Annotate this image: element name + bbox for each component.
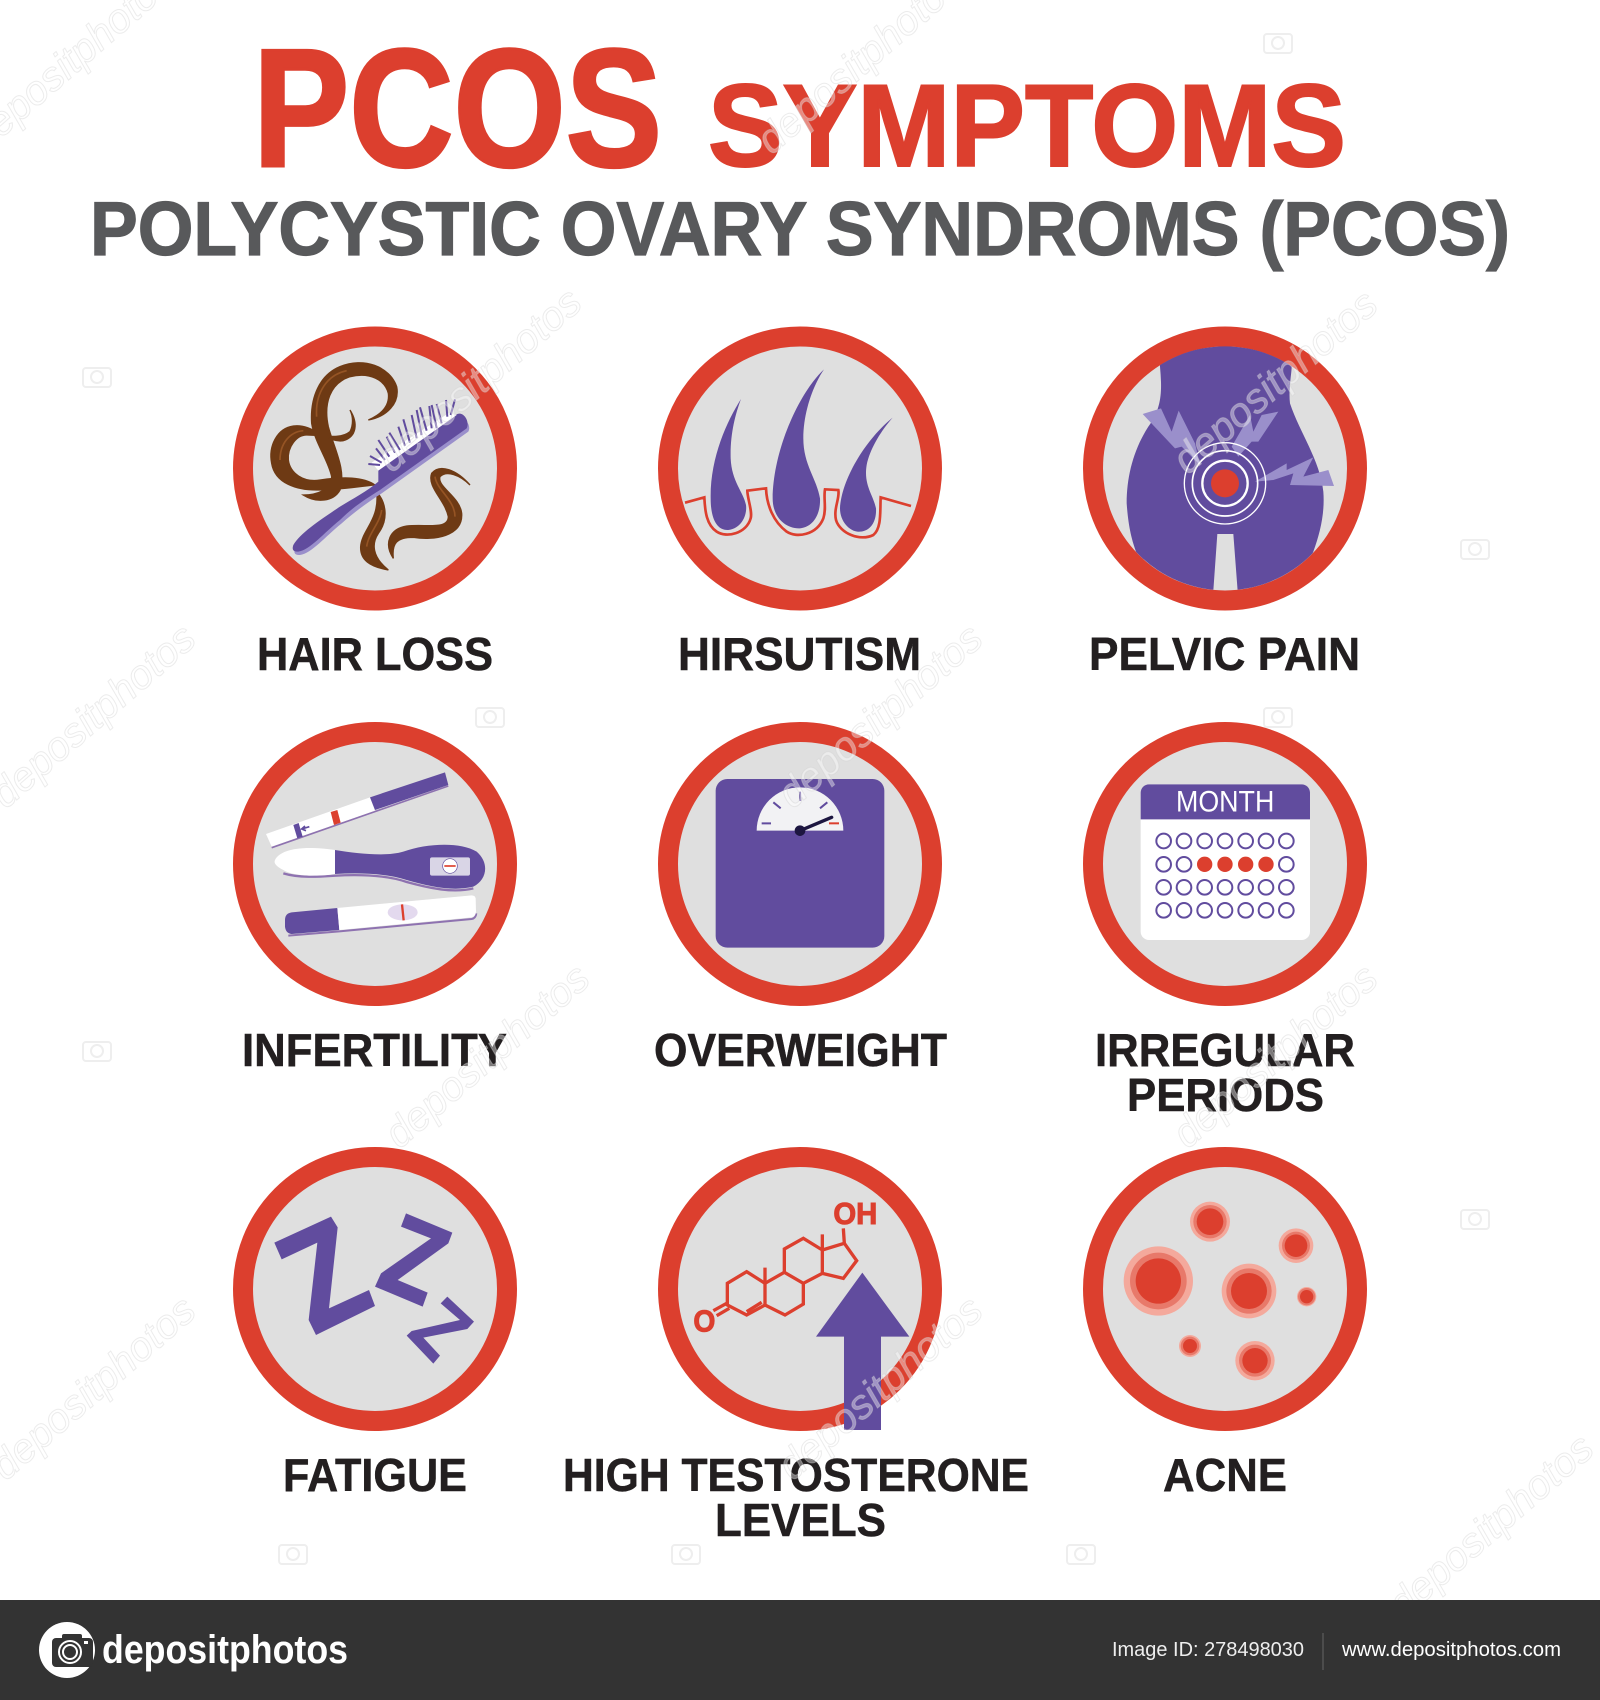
label: irregular periods: PERIODS xyxy=(1127,1069,1324,1121)
icon: pregnancy tests xyxy=(266,772,485,936)
icon: camera logo xyxy=(39,1622,95,1678)
icon: weighing scale xyxy=(716,779,884,948)
image id: Image ID: 278498030 xyxy=(1112,1639,1304,1661)
title: PCOS symptoms: PCOS xyxy=(253,14,662,202)
label: pelvic pain: PELVIC PAIN xyxy=(1089,628,1360,680)
title: PCOS symptoms xyxy=(253,14,1346,202)
panel: overweight xyxy=(654,732,947,1076)
logo wordmark: depositphotos xyxy=(102,1628,348,1672)
label: irregular periods xyxy=(1095,1024,1355,1121)
watermarks: depositphotos xyxy=(375,954,598,1157)
website: www.depositphotos.com xyxy=(1341,1639,1561,1661)
subtitle: POLYCYSTIC OVARY SYNDROMS (PCOS) xyxy=(90,187,1510,272)
panel: irregular periods xyxy=(1093,732,1357,1121)
icon: testosterone molecule and up arrow xyxy=(693,1197,909,1430)
icon: hair and brush xyxy=(271,363,470,570)
panel: fatigue xyxy=(243,1157,507,1501)
panel: acne xyxy=(1093,1157,1357,1501)
panel: hair loss xyxy=(243,336,507,680)
icon: hair follicles xyxy=(685,369,911,537)
panel: high testosterone levels xyxy=(563,1157,1029,1546)
watermarks: depositphotos xyxy=(1379,1424,1600,1627)
label: fatigue: FATIGUE xyxy=(283,1449,467,1501)
watermarks: depositphotos xyxy=(367,278,590,481)
icon: pelvis with pain target xyxy=(1127,340,1334,600)
icon: testosterone molecule and up arrow: O xyxy=(693,1305,715,1339)
label: acne: ACNE xyxy=(1163,1449,1287,1501)
panel: pelvic pain xyxy=(1089,336,1360,680)
label: hirsutism: HIRSUTISM xyxy=(678,628,921,680)
icon: acne spots xyxy=(1124,1202,1316,1380)
watermarks: depositphotos xyxy=(1163,954,1386,1157)
icon: sleeping Z letters xyxy=(274,1213,474,1364)
watermarks: depositphotos xyxy=(768,614,991,817)
watermarks: depositphotos xyxy=(768,1286,991,1489)
label: irregular periods: IRREGULAR xyxy=(1095,1024,1355,1076)
label: high testosterone levels: HIGH TESTOSTERONE xyxy=(563,1449,1029,1501)
panel: infertility xyxy=(242,732,507,1076)
label: infertility: INFERTILITY xyxy=(242,1024,507,1076)
label: high testosterone levels xyxy=(563,1449,1029,1546)
footer bar xyxy=(0,1600,1600,1700)
panel: hirsutism xyxy=(668,336,932,680)
title: PCOS symptoms: SYMPTOMS xyxy=(708,60,1346,191)
icon: testosterone molecule and up arrow: OH xyxy=(833,1197,877,1231)
label: hair loss: HAIR LOSS xyxy=(257,628,493,680)
icon: calendar xyxy=(1141,784,1310,940)
label: overweight: OVERWEIGHT xyxy=(654,1024,947,1076)
label: high testosterone levels: LEVELS xyxy=(715,1494,886,1546)
watermarks: depositphotos xyxy=(1163,280,1386,483)
icon: calendar: MONTH xyxy=(1176,786,1274,819)
